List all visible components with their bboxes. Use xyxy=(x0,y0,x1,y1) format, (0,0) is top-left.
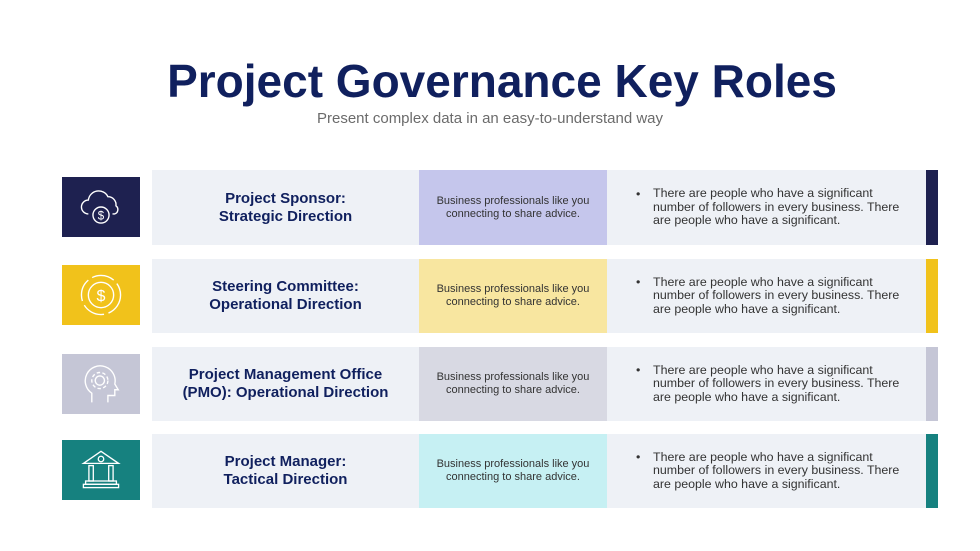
row 2: connecting to share advice. xyxy=(446,296,580,308)
row 2: There are people who have a significant xyxy=(653,275,873,289)
row 4 xyxy=(152,434,938,508)
row 4: Tactical Direction xyxy=(224,471,347,488)
subtitle: Present complex data in an easy-to-understand way xyxy=(317,110,663,127)
row 2: Business professionals like you xyxy=(437,283,589,295)
row 4: number of followers in every business. There xyxy=(653,463,899,477)
row 1: Project Sponsor: xyxy=(225,190,346,206)
row 2 xyxy=(152,259,938,333)
row 3: (PMO): Operational Direction xyxy=(183,384,388,401)
row 4: Project Manager: xyxy=(225,453,346,470)
row 1: • xyxy=(636,186,640,200)
icon: head gear xyxy=(62,354,140,414)
row 2: • xyxy=(636,275,640,289)
row 1: Strategic Direction xyxy=(219,208,352,224)
row 4: • xyxy=(636,450,640,464)
row 2: are people who have a significant. xyxy=(653,302,840,316)
icon: cloud dollar xyxy=(62,177,140,237)
row 4: are people who have a significant. xyxy=(653,477,840,491)
row 3: connecting to share advice. xyxy=(446,384,580,396)
icon: cloud dollar: $ xyxy=(98,211,105,223)
icon: bank xyxy=(62,440,140,500)
row 1: are people who have a significant. xyxy=(653,213,840,227)
row 3: are people who have a significant. xyxy=(653,390,840,404)
row 1: connecting to share advice. xyxy=(446,208,580,220)
row 1 xyxy=(152,170,938,245)
row 4: Business professionals like you xyxy=(437,458,589,470)
icon: dollar cycle: $ xyxy=(97,287,106,305)
row 4: There are people who have a significant xyxy=(653,450,873,464)
row 3: • xyxy=(636,363,640,377)
row 3: Project Management Office xyxy=(189,366,382,383)
row 2: number of followers in every business. There xyxy=(653,288,899,302)
icon: dollar cycle xyxy=(62,265,140,325)
row 1: There are people who have a significant xyxy=(653,186,873,200)
row 3 xyxy=(152,347,938,421)
row 1: Business professionals like you xyxy=(437,194,589,206)
row 1: number of followers in every business. There xyxy=(653,200,899,214)
title: Project Governance Key Roles xyxy=(167,55,837,107)
row 2: Operational Direction xyxy=(209,296,362,313)
row 2: Steering Committee: xyxy=(212,278,359,295)
row 3: number of followers in every business. There xyxy=(653,376,899,390)
row 3: Business professionals like you xyxy=(437,371,589,383)
row 3: There are people who have a significant xyxy=(653,363,873,377)
row 4: connecting to share advice. xyxy=(446,471,580,483)
